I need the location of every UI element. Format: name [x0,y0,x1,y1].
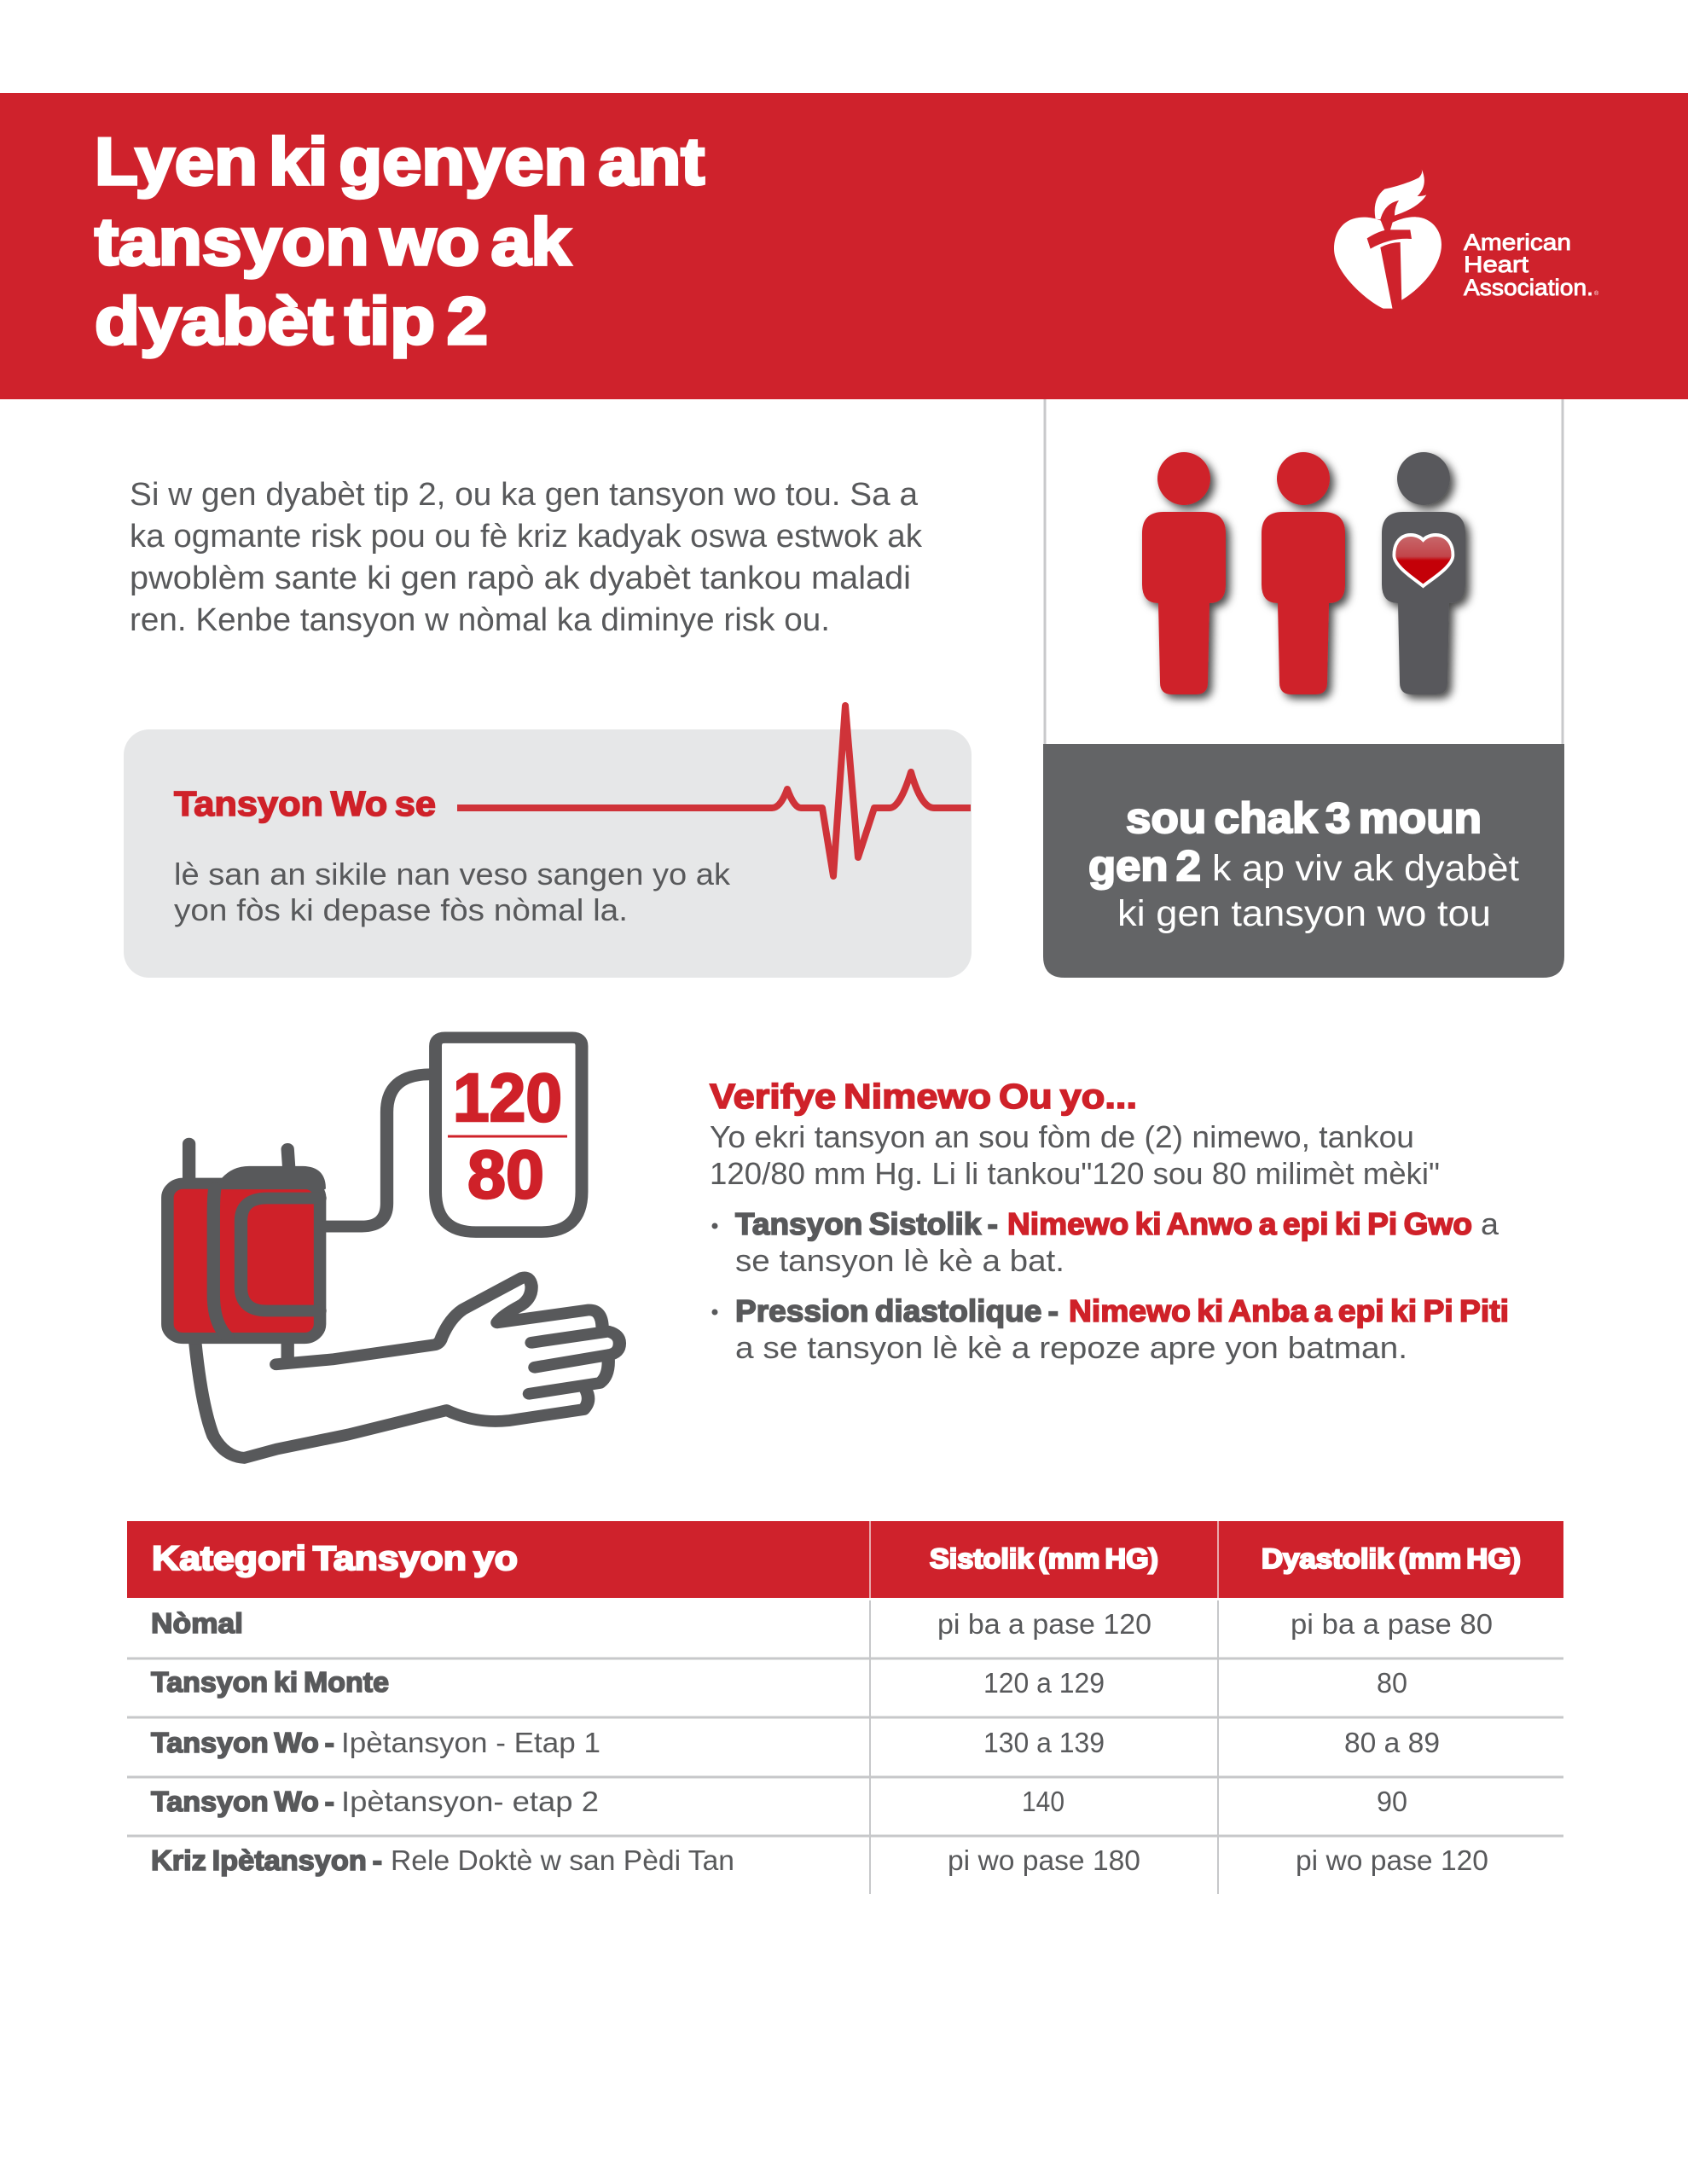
table row: stage 1: 130 a 139 [983,1727,1105,1758]
table row: normal: pi ba a pase 80 [1291,1608,1493,1640]
table row: normal [151,1607,1493,1640]
explanation text: 120/80 mm Hg. Li li tankou"120 sou 80 milimèt mèki" [710,1156,1440,1191]
title: tansyon wo ak [95,204,571,279]
icon: heart [1394,535,1453,586]
table row: stage 2: Ipètansyon- etap 2 [341,1786,599,1817]
table header row: Dyastolik (mm HG) [1262,1543,1521,1574]
heading: Tansyon Wo se: Tansyon Wo se [174,784,436,823]
stat box: k ap viv ak dyabèt [1212,848,1519,889]
table row: crisis: Rele Doktè w san Pèdi Tan [391,1844,734,1876]
bullet: diastolic: a se tansyon lè kè a repoze apre yon batman. [735,1330,1407,1365]
stat box: sou chak 3 moun [1126,794,1482,842]
definition text: yon fòs ki depase fòs nòmal la. [174,892,628,927]
logo wordmark: American [1464,229,1571,255]
table row: elevated [151,1666,1407,1699]
table row: elevated: 120 a 129 [983,1667,1105,1699]
stat box: ki gen tansyon wo tou [1117,893,1491,934]
monitor reading 120 over 80: 120 [453,1060,562,1136]
stat box [1043,744,1564,978]
table header row: Sistolik (mm HG) [930,1543,1158,1574]
table header row: Kategori Tansyon yo [152,1540,518,1577]
table row: crisis: pi wo pase 180 [948,1844,1140,1876]
table row: elevated: 80 [1377,1667,1407,1699]
bullet: diastolic: Nimewo ki Anba a epi ki Pi Piti [1069,1293,1509,1328]
bullet: systolic: Tansyon Sistolik - [735,1206,998,1241]
table row: normal: Nòmal [151,1607,243,1639]
table row: stage 2: 140 [1022,1786,1064,1817]
icon: person 1 [1142,452,1226,694]
monitor reading 120 over 80: 80 [467,1136,544,1212]
definition text [174,857,731,927]
icon: person 3 [1382,452,1465,694]
definition text: lè san an sikile nan veso sangen yo ak [174,857,731,892]
heading: Verifye Nimewo Ou yo: Verifye Nimewo Ou yo... [710,1077,1137,1116]
title: Lyen ki genyen ant [95,124,705,199]
bullet: diastolic: Pression diastolique - [735,1293,1059,1328]
header banner [0,93,1688,399]
icon: person 2 [1262,452,1345,694]
intro text block: Si w gen dyabèt tip 2, ou ka gen tansyon wo tou. Sa a [130,477,919,513]
icon: blood pressure cuff and monitor on arm [167,1037,619,1458]
title: dyabèt tip 2 [95,283,488,358]
bullet: systolic: se tansyon lè kè a bat. [735,1243,1064,1278]
table row: stage 1: Ipètansyon - Etap 1 [341,1727,600,1758]
intro text block: ren. Kenbe tansyon w nòmal ka diminye risk ou. [130,602,830,638]
table row: stage 1: 80 a 89 [1344,1727,1440,1758]
panel: definition of high blood pressure [124,706,972,978]
table row: elevated: Tansyon ki Monte [151,1666,389,1698]
text block: check your numbers [710,1077,1509,1365]
panel: statistic, 2 of 3 people [1043,399,1564,978]
logo: American Heart Association [1334,169,1599,310]
explanation text: Yo ekri tansyon an sou fòm de (2) nimewo, tankou [710,1119,1414,1154]
icon: heart and torch [1334,169,1441,310]
table row: stage 2: Tansyon Wo - [151,1786,334,1817]
bullet: diastolic [711,1293,1509,1365]
logo wordmark [1464,229,1599,300]
table row: stage 1 [151,1727,1440,1758]
table row: stage 2: 90 [1377,1786,1407,1817]
icon: heartbeat line [457,706,971,876]
table row: crisis: pi wo pase 120 [1296,1844,1488,1876]
people icons [1142,452,1465,694]
table row: normal: pi ba a pase 120 [937,1608,1151,1640]
table row: stage 2 [151,1786,1407,1817]
bullet: systolic: Nimewo ki Anwo a epi ki Pi Gwo [1007,1206,1472,1241]
intro text block: pwoblèm sante ki gen rapò ak dyabèt tankou maladi [130,561,911,596]
logo wordmark: ® [1594,290,1599,297]
table: blood pressure categories [127,1521,1563,1894]
table header row [127,1521,1563,1598]
table row: stage 1: Tansyon Wo - [151,1727,334,1758]
stat box: gen 2 [1088,842,1201,890]
logo wordmark: Heart [1464,252,1529,277]
explanation text [710,1119,1440,1191]
logo wordmark: Association. [1464,275,1593,300]
monitor reading 120 over 80 [448,1060,567,1212]
table row: crisis: Kriz Ipètansyon - [151,1844,382,1876]
bullet: systolic [711,1206,1499,1278]
title [95,124,705,358]
bullet: systolic: a [1481,1206,1499,1241]
intro text block [130,477,923,638]
table row: crisis [151,1844,1488,1876]
intro text block: ka ogmante risk pou ou fè kriz kadyak oswa estwok ak [130,519,923,555]
